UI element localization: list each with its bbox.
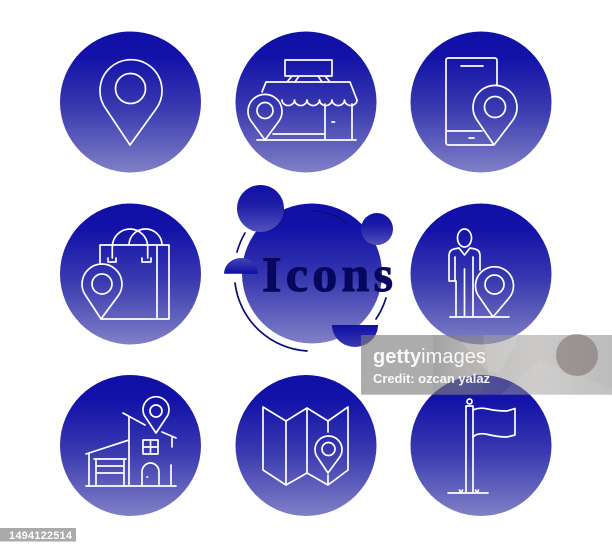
icon: map pin xyxy=(60,32,201,172)
bubble right xyxy=(361,213,393,245)
watermark logo: gettyimages xyxy=(373,346,486,368)
heading: Icons xyxy=(262,246,393,302)
image id badge: 1494122514 xyxy=(9,530,73,542)
icon: person with pin xyxy=(410,204,552,344)
decorative arcs xyxy=(235,233,386,351)
large centre circle xyxy=(242,204,382,344)
central badge: Icons xyxy=(224,185,393,351)
icon: folded map with pin xyxy=(236,375,376,516)
watermark credit: Credit: ozcan yalaz xyxy=(373,371,490,386)
icon: flag on pole xyxy=(410,375,552,516)
watermark banner xyxy=(361,334,612,395)
icon: shopping bag with pin xyxy=(60,204,201,344)
half circle bottom xyxy=(332,325,378,347)
icon: store with pin xyxy=(236,32,376,172)
icon: house with pin xyxy=(60,375,201,516)
icon: smartphone with pin xyxy=(410,32,552,172)
half circle left xyxy=(224,258,258,274)
bubble top left xyxy=(237,185,284,232)
watermark texture xyxy=(433,334,612,395)
